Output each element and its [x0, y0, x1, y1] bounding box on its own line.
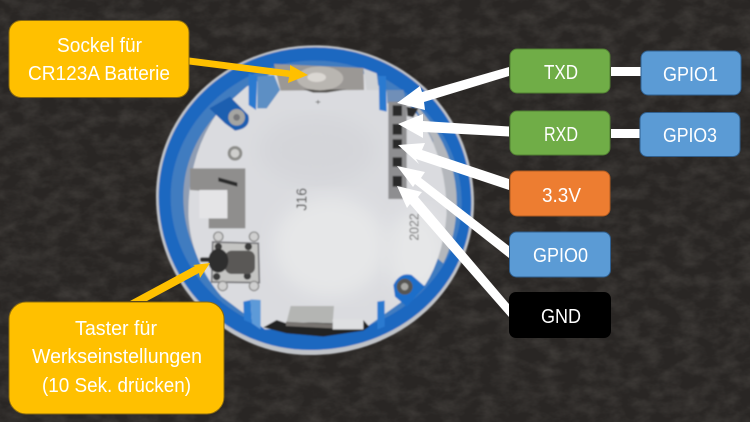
pin label: GND: GND — [541, 306, 581, 328]
plastic tabs — [243, 68, 407, 329]
callout: factory reset button: (10 Sek. drücken) — [42, 375, 191, 397]
right side gray band — [410, 98, 457, 263]
callout: battery socket: Sockel für — [57, 35, 142, 57]
bottom right screw boss — [393, 274, 425, 307]
cutout slot — [218, 177, 237, 187]
reset button — [200, 232, 259, 291]
blue housing ring — [159, 47, 471, 350]
arrow: battery socket pointer — [189, 58, 308, 83]
photo: opened round device — [156, 45, 474, 355]
pin label: TXD: TXD — [544, 62, 578, 84]
arrow: 3.3V — [398, 143, 509, 190]
inner translucent ledge — [171, 61, 462, 335]
arrow: RXD — [398, 114, 509, 138]
callout: battery socket: CR123A Batterie — [28, 63, 170, 85]
device outer rim — [156, 45, 474, 355]
callout: battery socket — [9, 20, 189, 98]
pin label: GND — [509, 292, 611, 338]
pin label: GPIO1: GPIO1 — [663, 64, 718, 86]
arrow: GPIO0 — [397, 166, 509, 258]
pin label: RXD — [510, 111, 610, 155]
pin label: 3.3V — [510, 171, 610, 216]
pin label: GPIO0 — [510, 232, 610, 277]
label J16: J16 — [294, 188, 310, 211]
connector: RXD to GPIO3 — [611, 129, 640, 138]
mounting hole — [228, 146, 242, 161]
callout: factory reset button: Taster für — [75, 318, 157, 340]
pin label: GPIO1 — [641, 51, 741, 95]
white panel in cutout — [199, 190, 227, 218]
pin label: 3.3V: 3.3V — [542, 185, 582, 207]
arrow: TXD — [397, 67, 509, 110]
pin header — [388, 102, 418, 199]
rectangular cutout — [190, 168, 245, 228]
callout: factory reset button: Werkseinstellungen — [32, 346, 202, 368]
top left screw boss — [209, 97, 249, 131]
arrow: GND — [397, 186, 509, 317]
pin label: TXD — [510, 49, 610, 93]
battery socket — [274, 64, 364, 104]
circuit board — [183, 70, 450, 333]
pin label: GPIO3: GPIO3 — [663, 125, 717, 147]
connector: TXD to GPIO1 — [611, 67, 641, 76]
arrow: button pointer — [130, 263, 210, 301]
pin label: GPIO0: GPIO0 — [533, 245, 588, 267]
pin label: GPIO3 — [640, 112, 740, 156]
board date print: 2022 — [408, 213, 422, 241]
callout: factory reset button — [9, 302, 224, 414]
bottom battery clip — [263, 306, 369, 337]
inner gray ledge — [183, 70, 452, 328]
pin label: RXD: RXD — [544, 124, 578, 146]
